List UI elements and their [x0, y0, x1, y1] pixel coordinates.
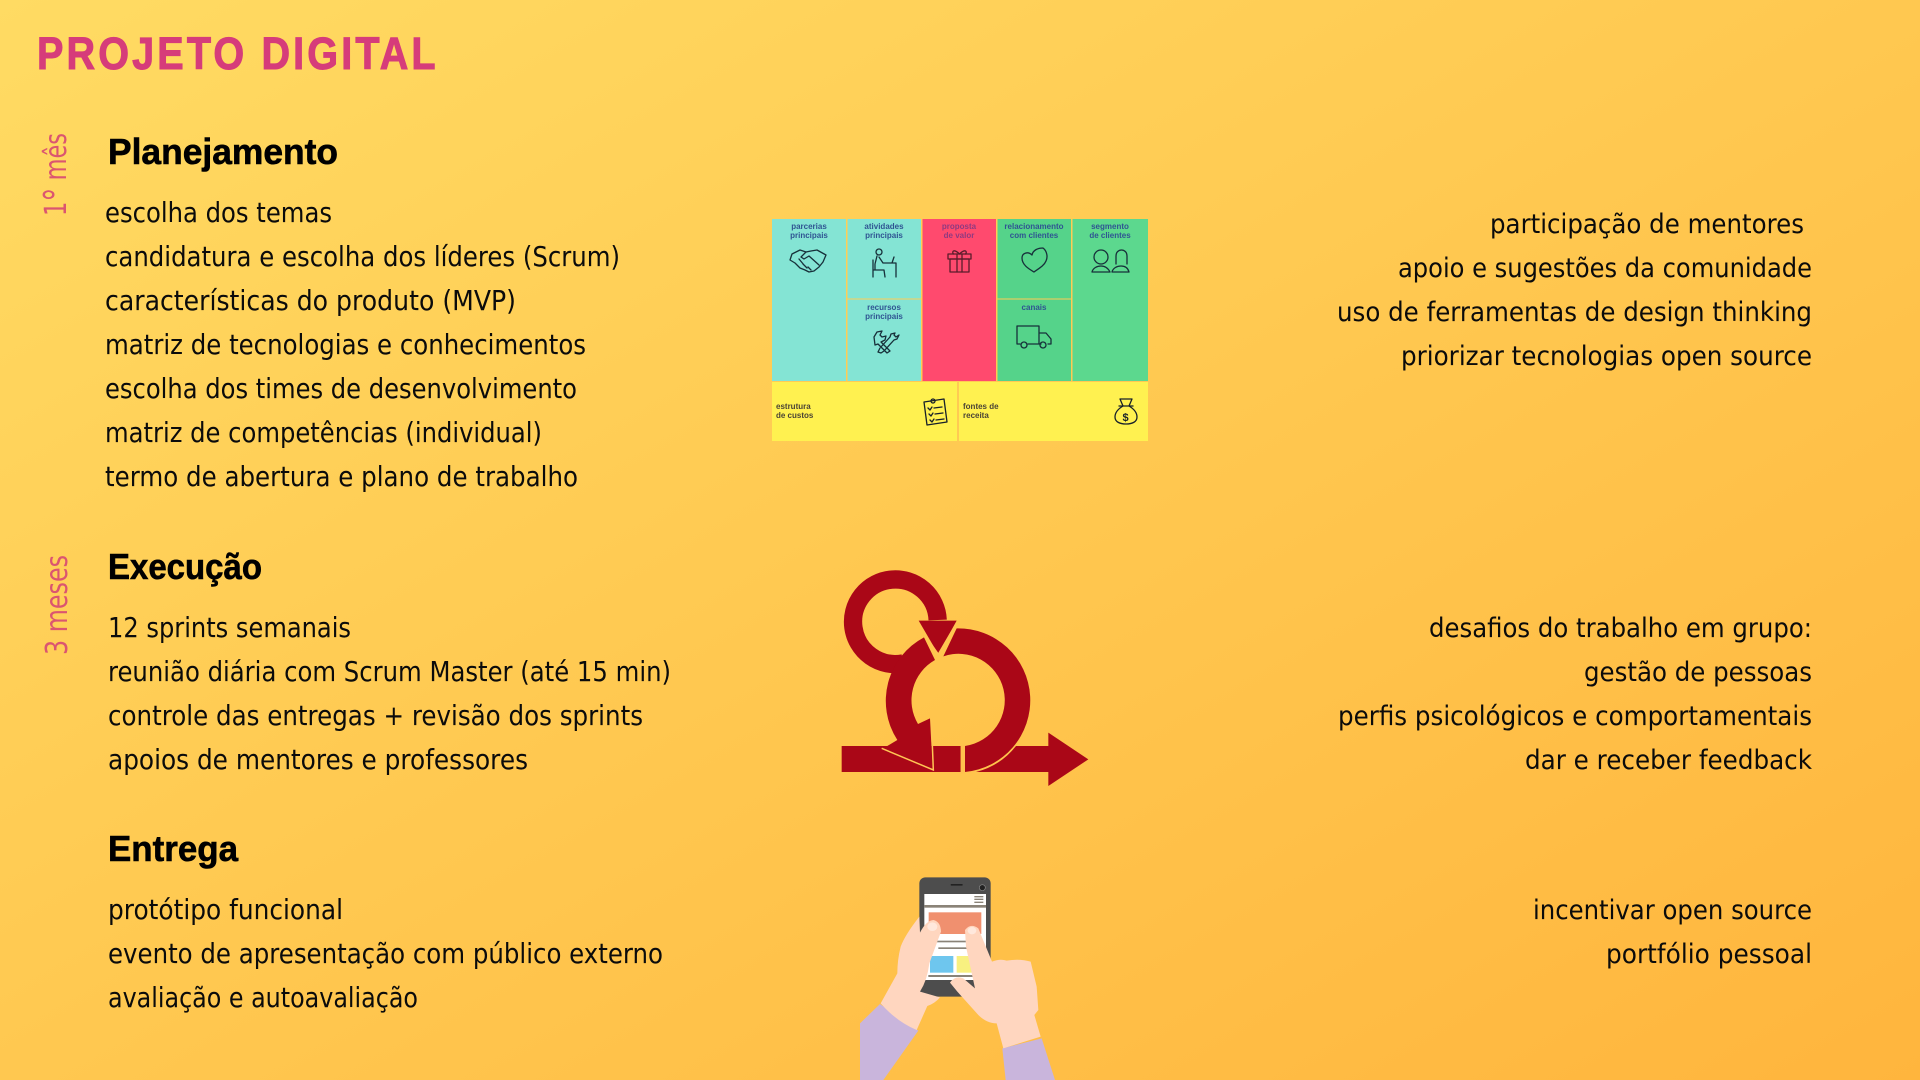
- cell: proposta de valor: proposta: [942, 222, 977, 231]
- duration label: 1º mês: mês: [39, 133, 74, 188]
- text block: entrega notes: portfólio pessoal: [1606, 939, 1812, 970]
- phone: [919, 877, 991, 997]
- text block: planejamento list: matriz de competências (individual): [105, 416, 542, 449]
- cell: relacionamento com clientes: relacionamento: [1004, 222, 1064, 231]
- panel: business model canvas: [772, 219, 1148, 441]
- text block: entrega notes: [1533, 895, 1812, 970]
- cell: relacionamento com clientes: [998, 219, 1071, 298]
- text block: execução list: reunião diária com Scrum Master (até 15 min): [108, 655, 671, 688]
- left hand: [881, 917, 941, 1030]
- text block: planejamento list: candidatura e escolha dos líderes (Scrum): [105, 240, 620, 273]
- text block: execução list: controle das entregas + revisão dos sprints: [108, 699, 643, 732]
- cell: segmento de clientes: de clientes: [1089, 231, 1131, 240]
- text block: planejamento list: escolha dos times de desenvolvimento: [105, 372, 577, 405]
- icon: scrum sprint cycle: [842, 579, 1088, 786]
- text block: planejamento notes: uso de ferramentas de design thinking: [1337, 297, 1812, 328]
- text block: planejamento list: características do produto (MVP): [105, 284, 516, 317]
- cell: proposta de valor: de valor: [944, 231, 974, 240]
- cell: atividades principais: atividades: [864, 222, 904, 231]
- cell: fontes de receita: $: [1122, 412, 1129, 424]
- cell: recursos principais: recursos: [867, 303, 901, 312]
- heading: Entrega: Entrega: [108, 828, 239, 869]
- cell: parcerias principais: parcerias: [791, 222, 827, 231]
- cell: recursos principais: [848, 300, 921, 381]
- text block: entrega list: [108, 893, 663, 1014]
- text block: planejamento notes: [1337, 209, 1812, 372]
- cell: segmento de clientes: segmento: [1091, 222, 1129, 231]
- text block: execução list: apoios de mentores e professores: [108, 743, 528, 776]
- cell: canais: [998, 300, 1071, 381]
- text block: planejamento notes: priorizar tecnologias open source: [1401, 341, 1812, 372]
- cell: atividades principais: [848, 219, 921, 298]
- text block: execução notes: desafios do trabalho em grupo:: [1429, 613, 1812, 644]
- text block: execução list: [108, 611, 671, 776]
- duration label: 1º mês: 1: [39, 197, 74, 216]
- text block: execução notes: gestão de pessoas: [1584, 657, 1812, 688]
- cell: estrutura de custos: de custos: [776, 411, 814, 420]
- cell: fontes de receita: receita: [963, 411, 989, 420]
- duration label: 3 meses: 3 meses: [40, 555, 75, 655]
- text block: entrega list: avaliação e autoavaliação: [108, 981, 418, 1014]
- cell: canais: canais: [1022, 303, 1047, 312]
- right sleeve: [1002, 1038, 1055, 1080]
- text block: planejamento list: [105, 196, 620, 493]
- cell: proposta de valor: [922, 219, 996, 381]
- cell: estrutura de custos: [772, 382, 957, 441]
- cell: relacionamento com clientes: com clientes: [1010, 231, 1059, 240]
- cell: recursos principais: principais: [865, 312, 903, 321]
- text block: planejamento notes: apoio e sugestões da comunidade: [1398, 253, 1812, 284]
- text block: entrega list: evento de apresentação com público externo: [108, 937, 663, 970]
- duration label: 1º mês: °: [36, 188, 80, 202]
- text block: entrega notes: incentivar open source: [1533, 895, 1812, 926]
- cell: parcerias principais: [772, 219, 846, 381]
- cell: segmento de clientes: [1072, 219, 1148, 381]
- cell: parcerias principais: principais: [790, 231, 828, 240]
- icon: hands holding phone: [860, 877, 1055, 1080]
- text block: planejamento list: matriz de tecnologias e conhecimentos: [105, 328, 586, 361]
- heading: Execução: Execução: [108, 546, 262, 587]
- title: PROJETO DIGITAL: [37, 29, 436, 79]
- cell: estrutura de custos: estrutura: [776, 402, 811, 411]
- text block: execução list: 12 sprints semanais: [108, 611, 351, 644]
- cell: fontes de receita: fontes de: [963, 402, 999, 411]
- cell: atividades principais: principais: [865, 231, 903, 240]
- text block: planejamento list: termo de abertura e plano de trabalho: [105, 460, 578, 493]
- left sleeve: [860, 1004, 918, 1080]
- text block: execução notes: perfis psicológicos e comportamentais: [1338, 701, 1812, 732]
- text block: planejamento list: escolha dos temas: [105, 196, 332, 229]
- text block: planejamento notes: participação de mentores: [1490, 209, 1804, 240]
- text block: execução notes: dar e receber feedback: [1525, 745, 1812, 776]
- cell: fontes de receita: [959, 382, 1148, 441]
- text block: execução notes: [1338, 613, 1812, 776]
- right hand: [950, 926, 1041, 1048]
- heading: Planejamento: Planejamento: [108, 131, 338, 172]
- text block: entrega list: protótipo funcional: [108, 893, 343, 926]
